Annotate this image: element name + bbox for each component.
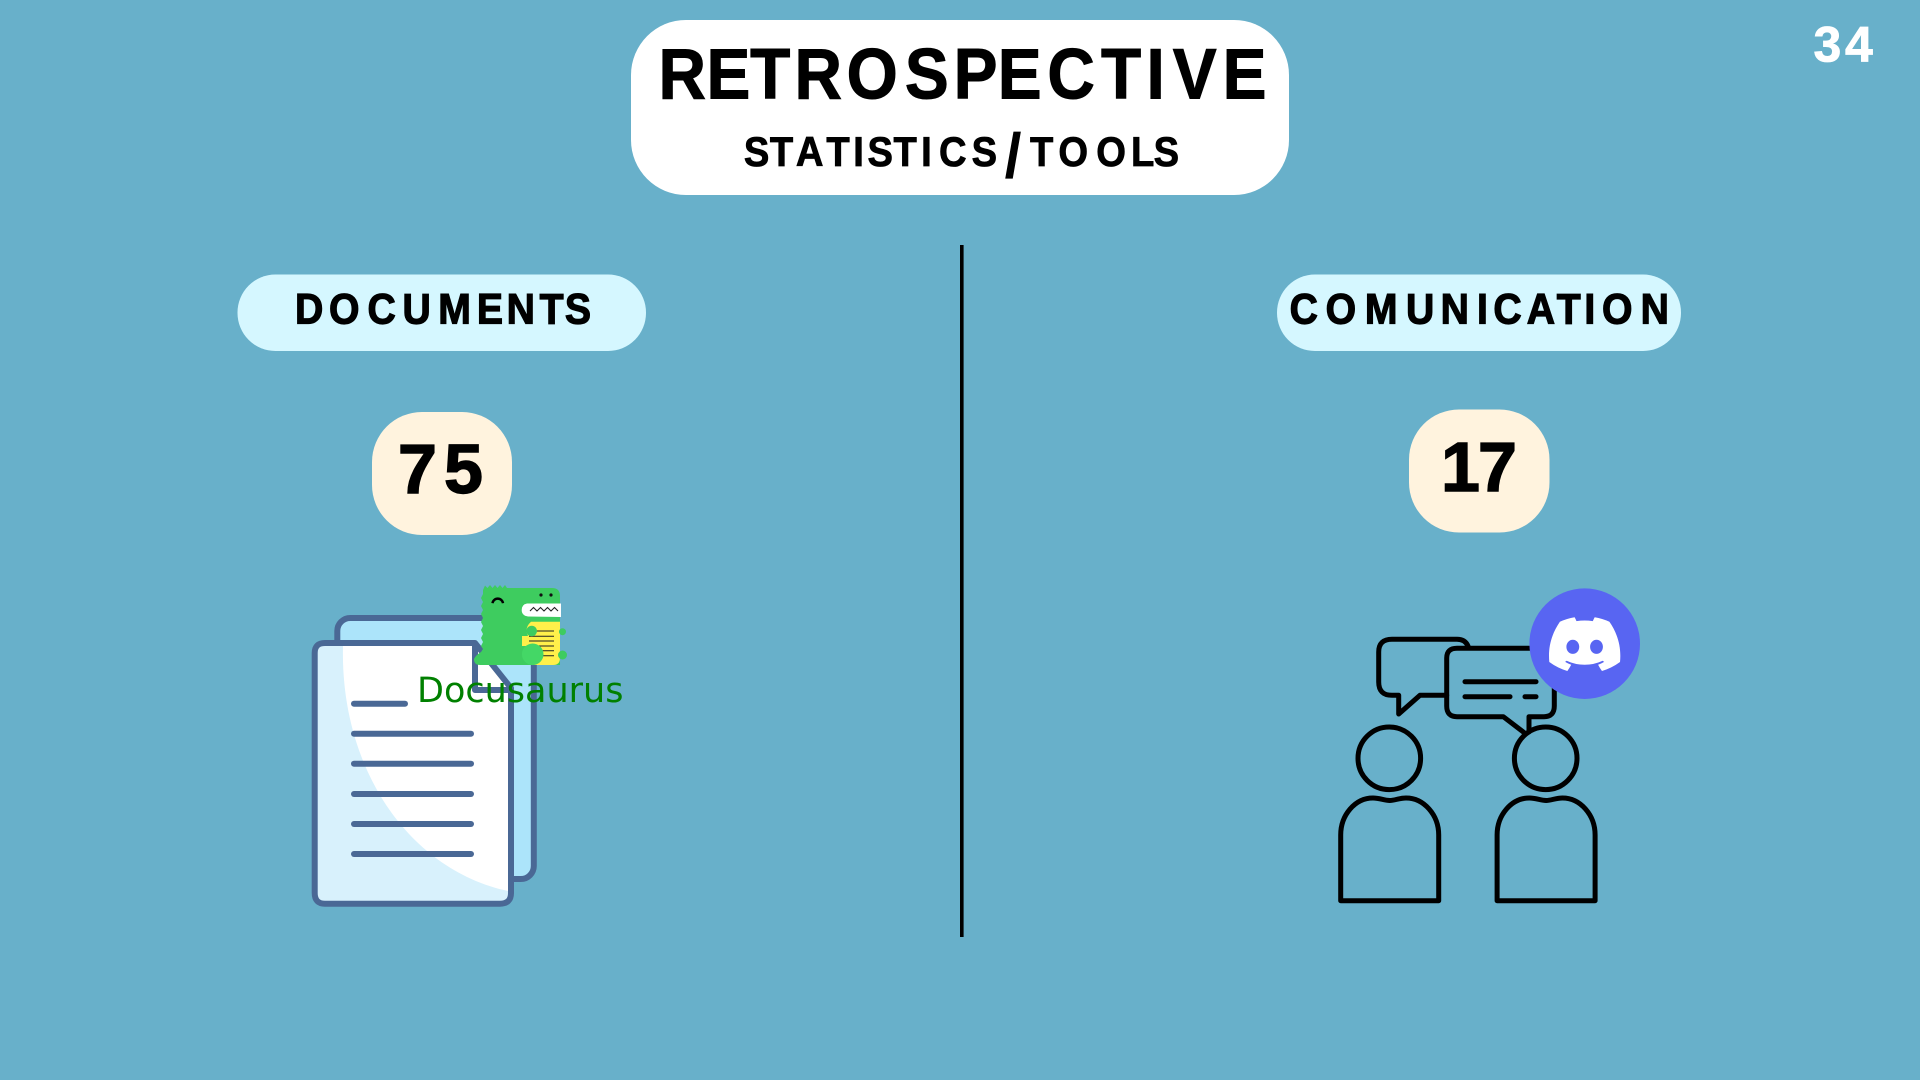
- left speech bubble: [1379, 639, 1468, 714]
- label pill: comunication: COMUNICATION: [1290, 285, 1669, 333]
- right person: [1497, 727, 1595, 901]
- count badge: 75: [372, 412, 512, 535]
- subheading: statistics/tools: /: [1005, 121, 1021, 191]
- left person: [1341, 727, 1439, 901]
- count badge: 75: 75: [398, 430, 483, 508]
- count badge: 17: [1409, 410, 1550, 532]
- icon: two people talking: [1341, 639, 1595, 901]
- panel: documents: [238, 274, 646, 904]
- label pill: documents: DOCUMENTS: [295, 285, 591, 333]
- label pill: documents: [238, 274, 646, 351]
- logo label: docusaurus: Docusaurus: [417, 671, 623, 711]
- count badge: 17: 17: [1441, 428, 1517, 506]
- right speech bubble: [1447, 648, 1554, 733]
- heading: retrospective: RETROSPECTIVE: [659, 34, 1266, 114]
- panel: communication: [1277, 274, 1681, 901]
- icon: document stack: [315, 618, 534, 904]
- icon: discord logo: [1529, 588, 1640, 699]
- label pill: comunication: [1277, 274, 1681, 351]
- title panel: [631, 20, 1289, 195]
- subheading: statistics/tools: STATISTICS: [744, 130, 997, 175]
- center divider: [960, 245, 964, 937]
- icon: docusaurus dinosaur logo: [474, 585, 567, 665]
- subheading: statistics/tools: TOOLS: [1030, 130, 1179, 175]
- page number: 34: [1814, 16, 1873, 72]
